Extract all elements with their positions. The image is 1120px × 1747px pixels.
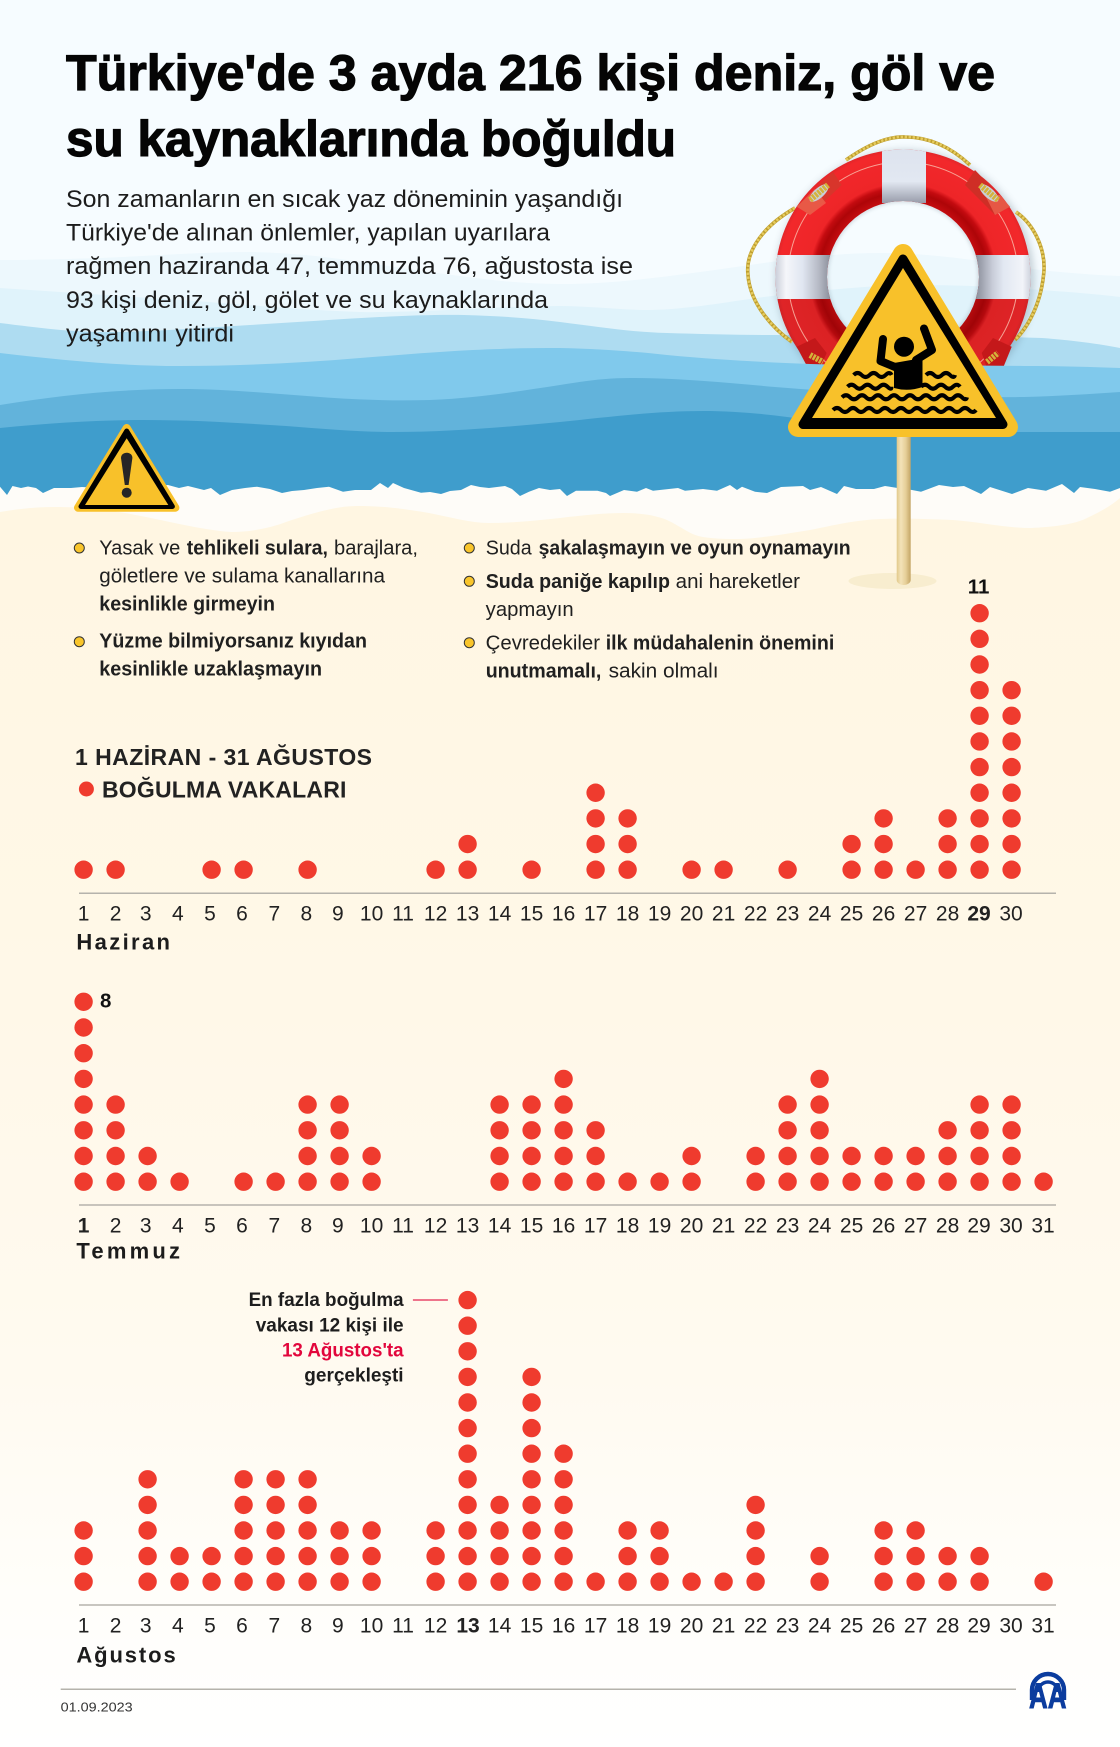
- July axis: 26: [872, 1214, 895, 1238]
- month label: Ağustos: Ağustos: [76, 1643, 176, 1668]
- tip: dangerous waters: göletlere ve sulama kanallarına: [99, 566, 386, 588]
- July axis: 31: [1031, 1214, 1055, 1238]
- June axis: 15: [520, 903, 543, 926]
- July axis: 30: [999, 1214, 1023, 1238]
- July axis: 16: [552, 1214, 575, 1238]
- safety tips: right column: [464, 538, 851, 683]
- August axis: 3: [140, 1614, 152, 1638]
- chart: July dot columns: [84, 989, 1044, 1182]
- June axis: 22: [744, 903, 767, 926]
- intro text: 93 kişi deniz, göl, gölet ve su kaynaklarında: [66, 287, 548, 314]
- August axis: 20: [680, 1614, 703, 1638]
- August axis: 19: [648, 1614, 671, 1638]
- tip: do not panic: ani hareketler: [676, 571, 800, 593]
- June axis: 30: [999, 903, 1023, 926]
- callout: peak on 13 August: 13 Ağustos'ta: [282, 1340, 404, 1362]
- chart: August dot columns: [84, 1300, 1044, 1582]
- chart heading and legend: [75, 743, 372, 802]
- July axis: 17: [584, 1214, 607, 1238]
- August axis: 31: [1031, 1614, 1055, 1638]
- icon: life buoy with rope: [746, 135, 1046, 366]
- August axis: 13: [456, 1614, 480, 1638]
- month label: Haziran: Haziran: [76, 929, 170, 954]
- August axis: 8: [301, 1614, 312, 1638]
- tip: swimming: [74, 631, 367, 680]
- August axis: 5: [204, 1614, 216, 1638]
- August axis: 7: [268, 1614, 280, 1638]
- intro text: Türkiye'de alınan önlemler, yapılan uyarılara: [66, 220, 550, 246]
- July axis: 6: [236, 1214, 248, 1238]
- tip: no joking in water: Suda: [486, 538, 533, 560]
- July axis: 14: [488, 1214, 512, 1238]
- August axis: 29: [967, 1614, 991, 1638]
- August axis: 24: [808, 1614, 832, 1638]
- July axis: [78, 1205, 1056, 1238]
- tip: dangerous waters: barajlara,: [334, 538, 418, 560]
- June axis: 12: [424, 903, 447, 926]
- tip: dangerous waters: Yasak ve: [99, 538, 180, 560]
- month label: Temmuz: Temmuz: [76, 1239, 180, 1264]
- July axis: 2: [110, 1214, 121, 1238]
- June axis: 11: [392, 903, 414, 926]
- June axis: 20: [680, 903, 703, 926]
- tip: first aid: sakin olmalı: [609, 661, 719, 683]
- August axis: 12: [424, 1614, 447, 1638]
- peak value: July 1: 8: [100, 989, 111, 1012]
- title: su kaynaklarında boğuldu: [66, 111, 676, 167]
- June axis: [78, 893, 1056, 926]
- background: sky and upper waves: [0, 0, 1120, 560]
- title: Türkiye'de 3 ayda 216 kişi deniz, göl ve: [66, 45, 995, 101]
- tip: dangerous waters: kesinlikle girmeyin: [99, 593, 275, 615]
- June axis: 23: [776, 903, 799, 926]
- July axis: 5: [204, 1214, 216, 1238]
- July axis: 7: [268, 1214, 280, 1238]
- August axis: 4: [172, 1614, 184, 1638]
- tip: do not panic: yapmayın: [486, 599, 574, 621]
- July axis: 28: [936, 1214, 959, 1238]
- July axis: 20: [680, 1214, 703, 1238]
- August axis: 28: [936, 1614, 959, 1638]
- June axis: 18: [616, 903, 639, 926]
- August axis: 15: [520, 1614, 543, 1638]
- July axis: 21: [712, 1214, 735, 1238]
- August axis: 21: [712, 1614, 735, 1638]
- July axis: 3: [140, 1214, 152, 1238]
- August axis: 16: [552, 1614, 575, 1638]
- chart: June dot columns: [84, 575, 1012, 870]
- July axis: 19: [648, 1214, 671, 1238]
- callout: peak on 13 August: vakası 12 kişi ile: [256, 1315, 404, 1337]
- tip: dangerous waters: tehlikeli sulara,: [187, 538, 328, 560]
- June axis: 4: [172, 903, 184, 926]
- tip: dangerous waters: [74, 538, 418, 615]
- chart heading and legend: 1 HAZİRAN - 31 AĞUSTOS: [75, 743, 372, 770]
- June axis: 8: [301, 903, 312, 926]
- title: [66, 45, 995, 167]
- June axis: 7: [268, 903, 280, 926]
- tip: do not panic: [464, 571, 800, 621]
- June axis: 29: [967, 903, 991, 926]
- icon: small exclamation warning: [78, 428, 175, 508]
- July axis: 15: [520, 1214, 543, 1238]
- June axis: 1: [78, 903, 89, 926]
- July axis: 13: [456, 1214, 479, 1238]
- footer rule: [61, 1688, 1016, 1690]
- August axis: 17: [584, 1614, 607, 1638]
- June axis: 17: [584, 903, 607, 926]
- tip: first aid: ilk müdahalenin önemini: [606, 632, 834, 654]
- July axis: 27: [904, 1214, 927, 1238]
- August axis: 2: [110, 1614, 121, 1638]
- June axis: 14: [488, 903, 512, 926]
- July axis: 12: [424, 1214, 447, 1238]
- June axis: 24: [808, 903, 832, 926]
- July axis: 24: [808, 1214, 832, 1238]
- chart heading and legend: BOĞULMA VAKALARI: [102, 775, 346, 802]
- June axis: 25: [840, 903, 863, 926]
- June axis: 27: [904, 903, 927, 926]
- June axis: 9: [332, 903, 344, 926]
- July axis: 29: [967, 1214, 991, 1238]
- peak value: June 29: 11: [968, 575, 989, 598]
- June axis: 5: [204, 903, 216, 926]
- icon: warning sign with pole and drowning person: [798, 254, 1008, 589]
- August axis: 26: [872, 1614, 895, 1638]
- tip: do not panic: Suda paniğe kapılıp: [486, 571, 670, 593]
- July axis: 4: [172, 1214, 184, 1238]
- tip: first aid: [464, 632, 834, 683]
- June axis: 16: [552, 903, 575, 926]
- August axis: 27: [904, 1614, 927, 1638]
- intro text: Son zamanların en sıcak yaz döneminin yaşandığı: [66, 186, 623, 213]
- intro text: rağmen haziranda 47, temmuzda 76, ağustosta ise: [66, 253, 633, 280]
- callout: peak on 13 August: gerçekleşti: [304, 1365, 404, 1387]
- tip: first aid: unutmamalı,: [486, 661, 601, 683]
- July axis: 8: [301, 1214, 312, 1238]
- August axis: 9: [332, 1614, 344, 1638]
- June axis: 26: [872, 903, 895, 926]
- safety tips: left column: [74, 538, 418, 680]
- tip: no joking in water: şakalaşmayın ve oyun oynamayın: [539, 538, 851, 560]
- June axis: 19: [648, 903, 671, 926]
- date: 01.09.2023: [61, 1700, 133, 1714]
- August axis: 25: [840, 1614, 863, 1638]
- August axis: 14: [488, 1614, 512, 1638]
- July axis: 10: [360, 1214, 383, 1238]
- August axis: 6: [236, 1614, 248, 1638]
- July axis: 1: [78, 1214, 90, 1238]
- August axis: 23: [776, 1614, 799, 1638]
- tip: first aid: Çevredekiler: [486, 632, 600, 654]
- July axis: 9: [332, 1214, 344, 1238]
- August axis: 22: [744, 1614, 767, 1638]
- July axis: 25: [840, 1214, 863, 1238]
- June axis: 2: [110, 903, 121, 926]
- intro text: [66, 186, 633, 348]
- August axis: 18: [616, 1614, 639, 1638]
- tip: swimming: Yüzme bilmiyorsanız kıyıdan: [99, 631, 367, 653]
- callout: peak on 13 August: En fazla boğulma: [249, 1289, 404, 1311]
- June axis: 10: [360, 903, 383, 926]
- July axis: 23: [776, 1214, 799, 1238]
- August axis: 1: [78, 1614, 89, 1638]
- June axis: 13: [456, 903, 479, 926]
- June axis: 6: [236, 903, 248, 926]
- July axis: 22: [744, 1214, 767, 1238]
- July axis: 18: [616, 1214, 639, 1238]
- June axis: 3: [140, 903, 152, 926]
- intro text: yaşamını yitirdi: [66, 320, 234, 348]
- logo: AA: AA: [1029, 1677, 1066, 1716]
- August axis: [78, 1605, 1056, 1638]
- August axis: 10: [360, 1614, 383, 1638]
- August axis: 11: [392, 1614, 414, 1638]
- June axis: 28: [936, 903, 959, 926]
- July axis: 11: [392, 1214, 414, 1238]
- tip: swimming: kesinlikle uzaklaşmayın: [99, 658, 322, 680]
- callout: peak on 13 August: [249, 1289, 448, 1387]
- June axis: 21: [712, 903, 735, 926]
- August axis: 30: [999, 1614, 1023, 1638]
